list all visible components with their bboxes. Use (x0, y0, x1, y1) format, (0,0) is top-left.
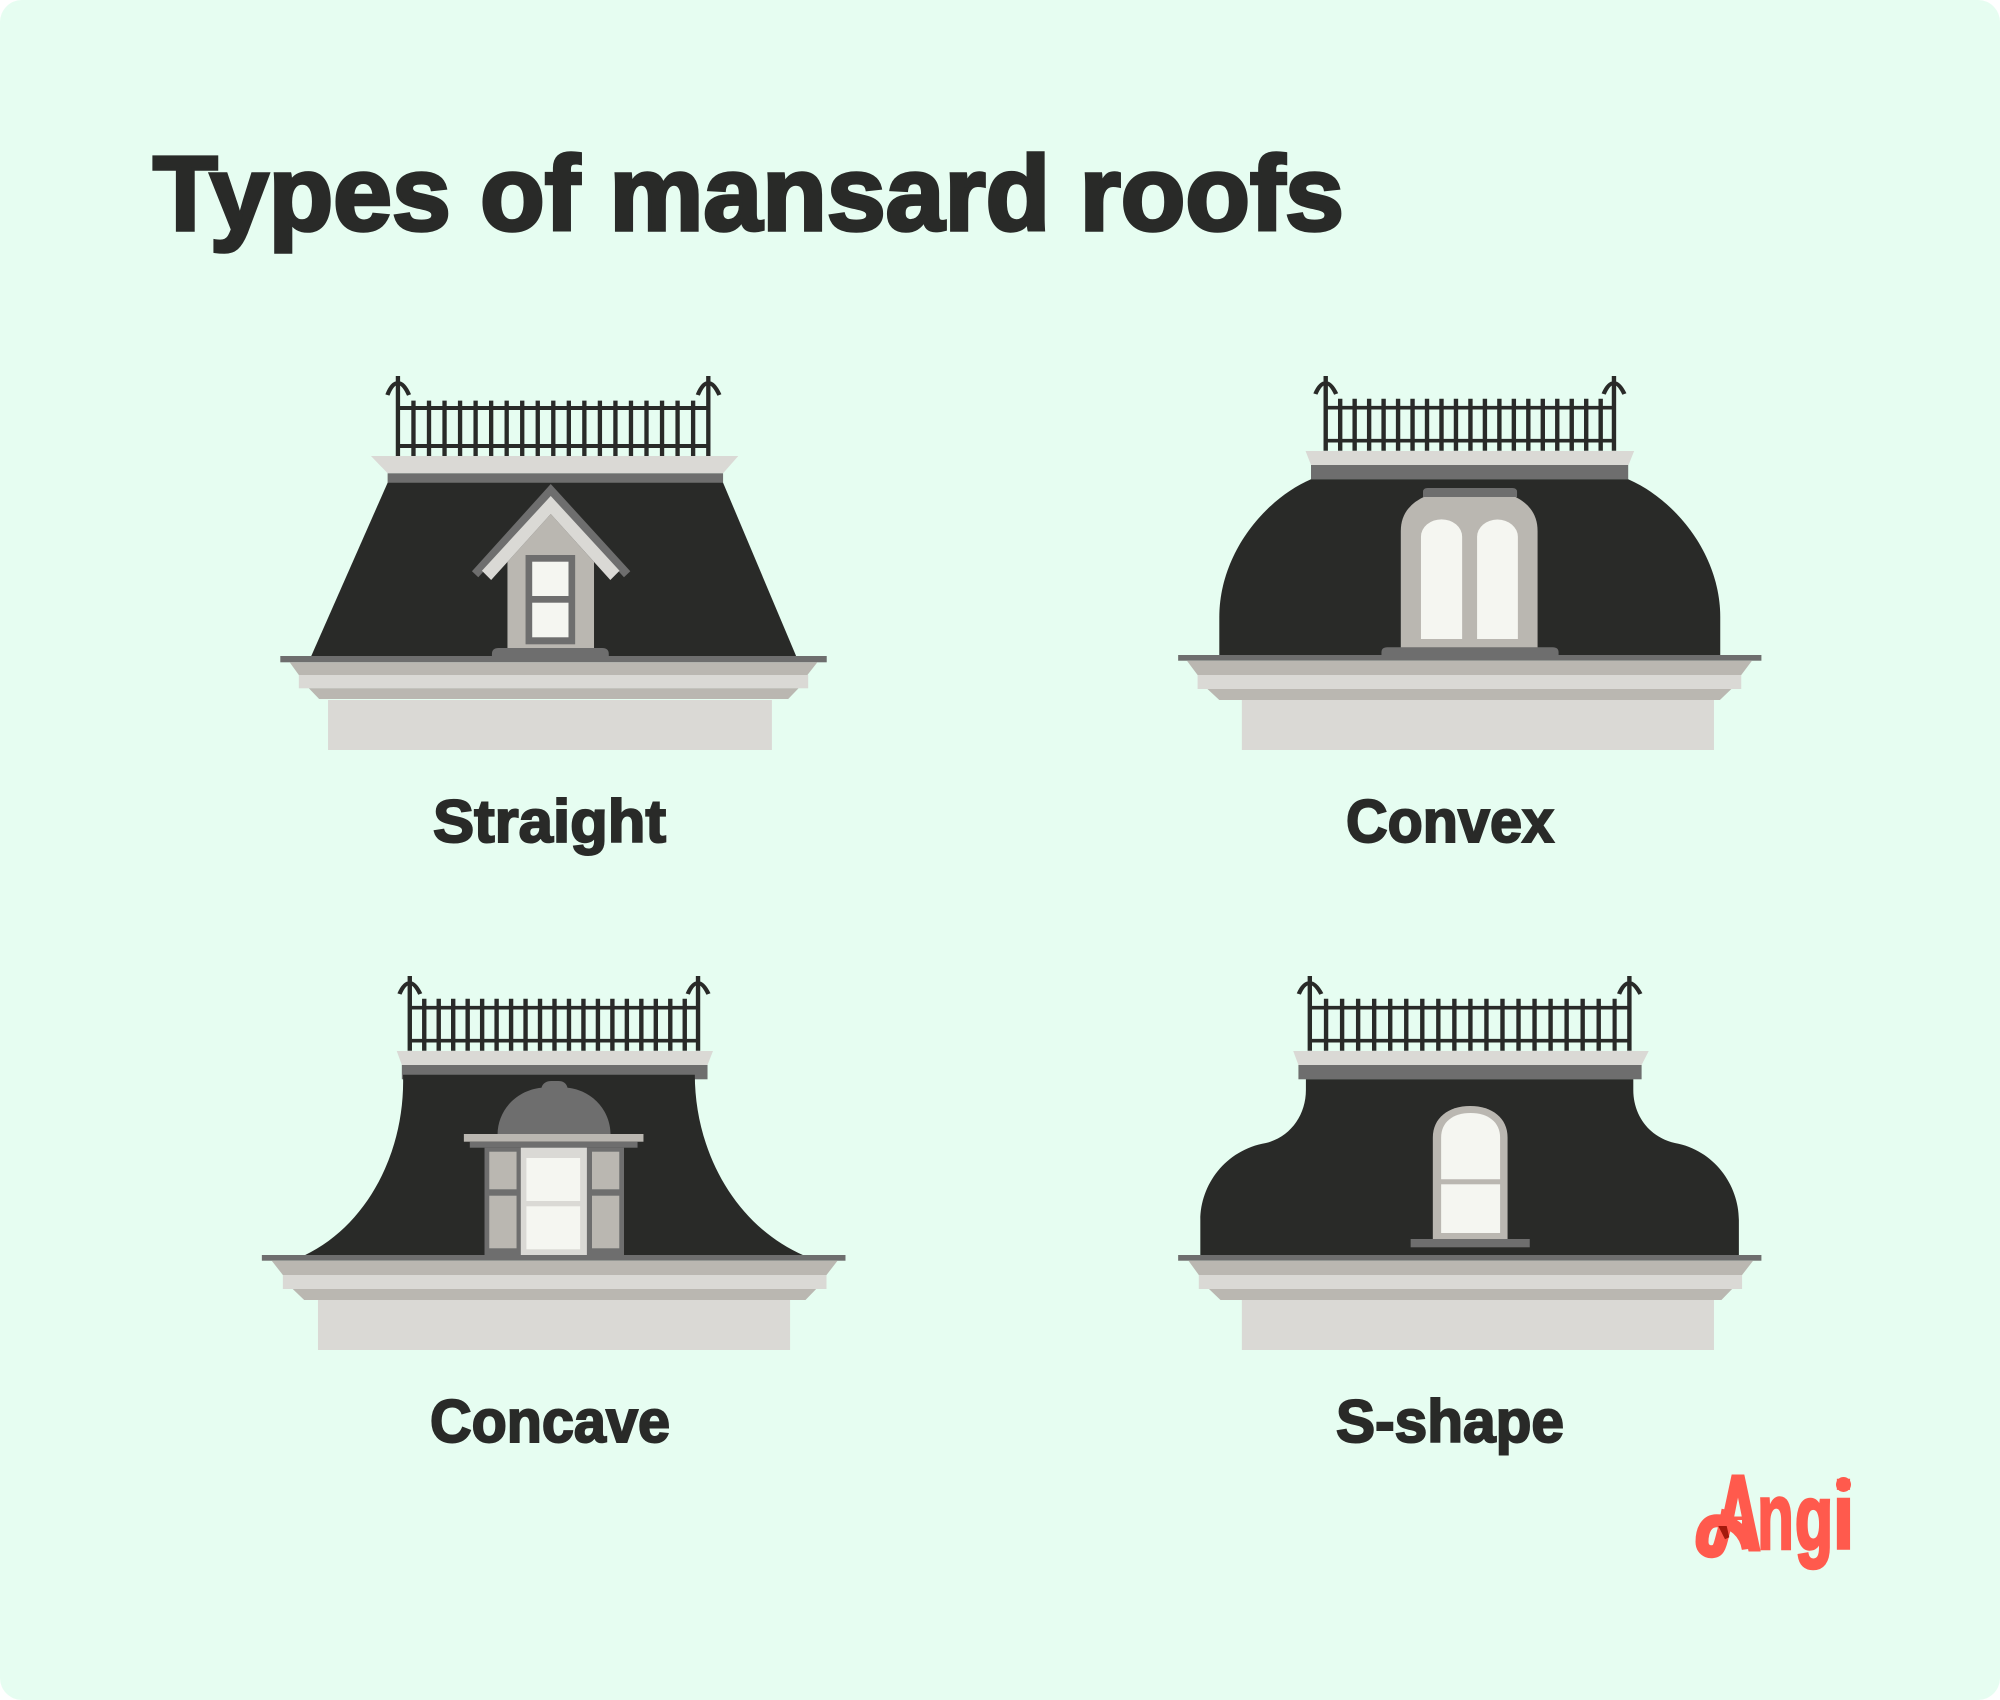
top cap (397, 1051, 713, 1065)
panel: S-shape mansard roof (1178, 976, 1761, 1350)
roof slope (311, 483, 796, 656)
roof band (402, 1065, 708, 1079)
top cap (1293, 1051, 1649, 1065)
roof slope (304, 1075, 804, 1256)
label: Straight: Straight (433, 788, 666, 855)
eave (1178, 1255, 1761, 1261)
logo: Angi: i (1832, 1463, 1856, 1570)
logo: Angi: g (1795, 1467, 1833, 1569)
panel: concave mansard roof (262, 976, 845, 1350)
logo: Angi: A (1716, 1456, 1760, 1572)
roof band (1298, 1065, 1642, 1079)
wall (1242, 1300, 1714, 1350)
fence (399, 976, 708, 1051)
dormer (464, 1081, 643, 1256)
logo: Angi (1696, 1474, 1851, 1570)
wall (328, 700, 772, 750)
label: Concave: Concave (430, 1388, 670, 1455)
cornice (1188, 1261, 1753, 1300)
eave (280, 656, 827, 662)
logo: Angi: n (1757, 1463, 1794, 1570)
panel: straight mansard roof (280, 376, 827, 750)
title: Types of mansard roofs (153, 135, 1344, 253)
top cap (1306, 451, 1634, 465)
dormer window (1411, 1106, 1530, 1247)
eave (1178, 655, 1761, 661)
cornice (272, 1261, 838, 1300)
fence (387, 376, 719, 456)
fence (1315, 376, 1624, 451)
roof slope (1200, 1079, 1739, 1256)
fence (1299, 976, 1640, 1051)
eave (262, 1255, 845, 1261)
dormer (1381, 488, 1559, 660)
top cap (371, 456, 738, 473)
label: Convex: Convex (1346, 788, 1554, 855)
roof band (1311, 465, 1628, 479)
label: S-shape: S-shape (1336, 1388, 1564, 1455)
roof band (388, 473, 723, 483)
cornice (1187, 661, 1752, 700)
cornice (290, 662, 817, 699)
wall (1242, 700, 1714, 750)
roof slope (1219, 479, 1720, 656)
wall (318, 1300, 790, 1350)
dormer (472, 484, 630, 662)
panel: convex mansard roof (1178, 376, 1761, 750)
